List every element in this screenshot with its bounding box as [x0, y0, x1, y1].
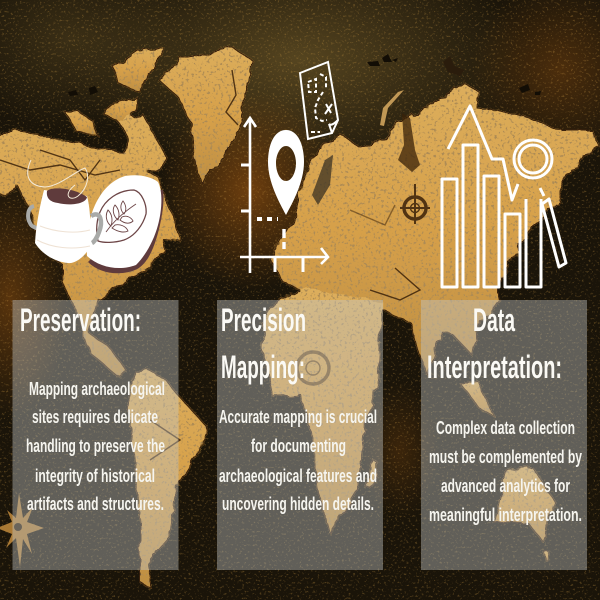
heading: precision mapping	[221, 302, 306, 385]
text block: precision mapping body: for documenting	[251, 436, 346, 456]
tasmania	[544, 552, 550, 562]
heading: data interpretation	[427, 302, 562, 385]
text block: precision mapping body: Accurate mapping is crucial	[219, 407, 377, 427]
heading: precision mapping: Precision	[221, 302, 306, 338]
south east asia	[460, 380, 495, 417]
text block: preservation body: sites requires delicate	[32, 407, 158, 427]
text block: preservation body: artifacts and structures.	[27, 494, 164, 514]
text block: preservation body	[26, 379, 165, 514]
map borders and compass rose	[0, 70, 430, 460]
heading: data interpretation: Data	[473, 302, 515, 338]
eurasia	[270, 82, 600, 377]
text block: precision mapping body	[219, 407, 377, 514]
africa	[262, 288, 383, 535]
icon: teacup and saucer	[28, 160, 164, 273]
greenland	[160, 47, 253, 187]
text block: preservation body: Mapping archaeological	[29, 379, 165, 399]
panel: preservation	[12, 300, 178, 570]
icon: compass star bottom left	[0, 493, 44, 567]
heading: precision mapping: Mapping:	[221, 349, 305, 385]
scandinavia and inland seas on the map	[68, 54, 541, 205]
icon: treasure map	[300, 62, 338, 139]
north america	[0, 110, 182, 378]
text block: precision mapping body: uncovering hidden details.	[222, 494, 374, 514]
australia	[493, 467, 557, 543]
icon: bar chart with magnifier	[442, 106, 566, 287]
panel: precision mapping	[217, 300, 383, 570]
text block: precision mapping body: archaeological features and	[219, 466, 377, 486]
icon: location pin and axes chart	[240, 118, 328, 273]
panel: data interpretation	[421, 300, 587, 570]
text block: preservation body: handling to preserve the	[26, 436, 165, 456]
text block: preservation body: integrity of historical	[35, 466, 155, 486]
madagascar	[366, 458, 378, 490]
south america	[128, 367, 208, 590]
arctic islands	[113, 47, 167, 93]
heading: preservation: Preservation:	[20, 302, 141, 338]
text block: data interpretation body	[429, 418, 582, 525]
